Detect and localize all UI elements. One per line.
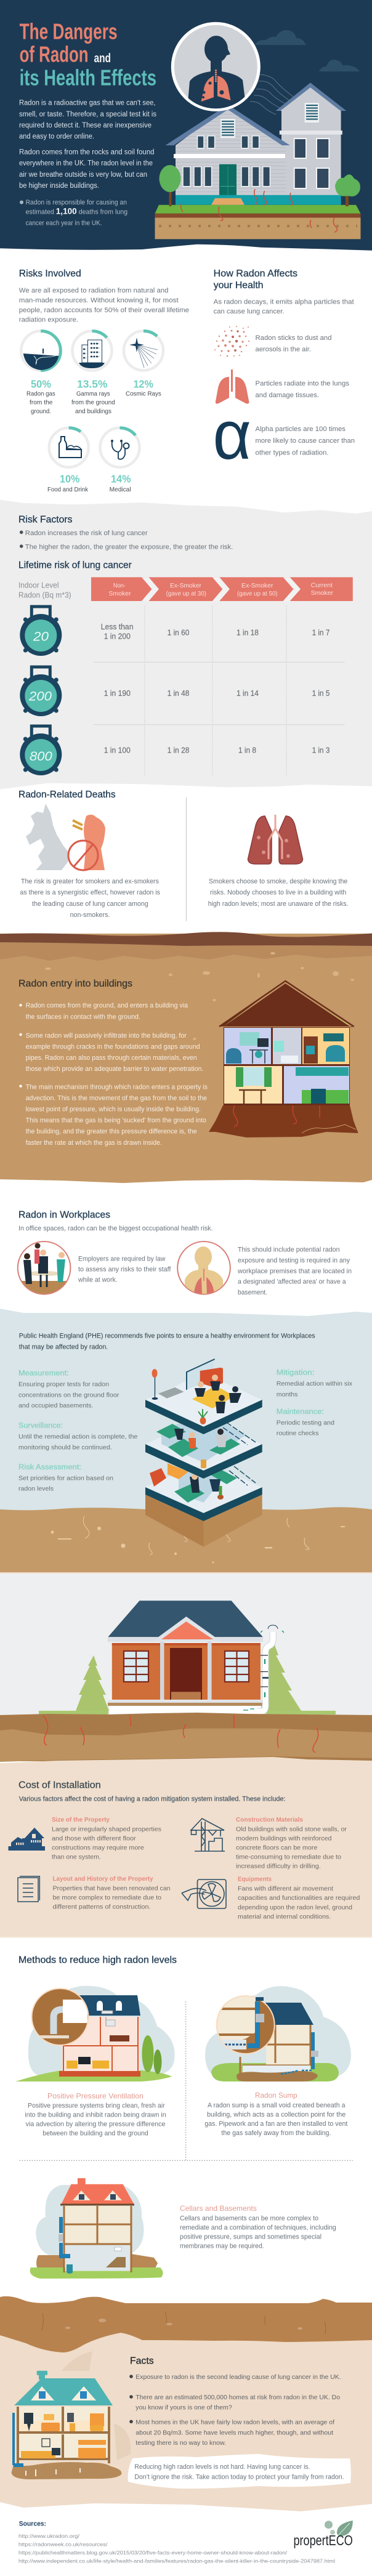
- table grid lines: [94, 605, 345, 776]
- bullet: advection: the building, and the greater this pressure difference is, the: [26, 1128, 197, 1136]
- illustration: facts house: [11, 2371, 121, 2479]
- fact bullets: There are an estimated 500,000 homes at risk from radon in the UK. Do: [135, 2394, 340, 2401]
- cost factor: size of property: and those with different floor: [52, 1835, 136, 1842]
- text: smokers choose: [208, 878, 349, 908]
- cost factor: equipments: Equipments: [238, 1876, 272, 1883]
- table row: 200: 1 in 48: [168, 689, 189, 698]
- text: potential radon exposure: [237, 1246, 352, 1296]
- text: alpha particles: Alpha particles are 100 times: [255, 426, 346, 433]
- intro text: Radon is a radioactive gas that we can't see,: [19, 100, 155, 107]
- stat: 50% radon gas: 50%: [31, 378, 51, 390]
- text: radon sump: Radon Sump: [255, 2091, 297, 2100]
- text: particles radiate: and damage tissues.: [255, 392, 319, 399]
- point: risk assessment: Set priorities for action based on: [18, 1474, 113, 1482]
- tower: [281, 110, 341, 196]
- fact bullets: testing there is no way to know.: [135, 2439, 226, 2447]
- cost factor: equipments: Fans with different air movement: [238, 1885, 333, 1892]
- dotted dividers: [20, 2001, 353, 2162]
- text: radon sticks: Radon sticks to dust and: [255, 334, 331, 342]
- text: particles radiate: Particles radiate into the lungs: [255, 380, 350, 387]
- callout: reducing high radon levels: Reducing high radon levels is not hard. Having lung cancer is.: [134, 2463, 310, 2471]
- stopwatch: 200: 200: [28, 690, 52, 704]
- text: employers: while at work.: [78, 1277, 118, 1284]
- stat: 10% food and drink: Food and Drink: [47, 486, 89, 493]
- stat: 14% medical: [100, 428, 139, 493]
- sources: http://www.ukradon.org/: [18, 2533, 80, 2539]
- stopwatch: 200: [20, 667, 62, 716]
- logo: propertECO: [293, 2521, 353, 2548]
- panel: risk factors background: [0, 500, 372, 789]
- heading: facts: Facts: [130, 2356, 154, 2366]
- text: positive pressure ventilation: Positive pressure systems bring clean, fresh air: [28, 2102, 165, 2110]
- callout: reducing high radon levels: [128, 2454, 351, 2489]
- text: synergistic effect: the leading cause of lung cancer among: [32, 900, 148, 908]
- risks text: man-made resources. Without knowing it, for most: [19, 297, 179, 304]
- cost factor: size of property: than one system.: [52, 1854, 101, 1861]
- panel: PHE background: [0, 1309, 372, 1510]
- text: synergistic effect: The risk is greater for smokers and ex-smokers: [21, 878, 159, 885]
- gable: [152, 1617, 222, 1642]
- stat: 12% cosmic rays: [124, 331, 163, 397]
- text: potential radon exposure: This should include potential radon: [238, 1246, 340, 1254]
- cost factor: construction materials: time-consuming to remediate due to: [236, 1854, 341, 1861]
- stat: 13.5% gamma rays: Gamma rays: [76, 390, 110, 397]
- fact bullets: Most homes in the UK have fairly low radon levels, with an average of: [135, 2419, 334, 2426]
- text: potential radon exposure: exposure and testing is required in any: [238, 1257, 350, 1264]
- stopwatch: 800: [20, 726, 62, 775]
- upper rooms: [224, 1027, 350, 1104]
- icon: alpha symbol: α: [213, 397, 251, 474]
- point: risk assessment: [18, 1464, 113, 1493]
- PHE intro text: Public Health England (PHE) recommends five points to ensure a healthy environment for Workplaces: [19, 1333, 315, 1340]
- title: and: [94, 52, 111, 65]
- cost factor: construction materials: concrete floors can be more: [236, 1844, 318, 1851]
- walls: [110, 1642, 262, 1700]
- title: its Health Effects: [20, 65, 156, 90]
- icon: house: [9, 1828, 45, 1851]
- chevron header: Current: [311, 581, 333, 589]
- text: positive pressure ventilation: between the building and the ground: [42, 2130, 148, 2138]
- text: positive pressure ventilation: [25, 2091, 166, 2138]
- stopwatch: 800: 800: [30, 749, 52, 764]
- chevron header: [91, 577, 353, 601]
- table row: 20: 1 in 7: [312, 629, 330, 637]
- heading: methods: Methods to reduce high radon levels: [18, 1955, 177, 1966]
- intro text: and easy to order online.: [19, 133, 94, 140]
- text: alpha particles: [255, 426, 355, 456]
- point: maintenance: Maintenance:: [277, 1408, 324, 1416]
- intro text: smell, or taste. Therefore, a special test kit is: [19, 111, 156, 118]
- text: synergistic effect: [20, 878, 160, 919]
- icon: crane: [191, 1819, 225, 1851]
- text: employers: [78, 1255, 171, 1284]
- heading: lifetime risk: Lifetime risk of lung cancer: [18, 560, 132, 571]
- point: mitigation: months: [277, 1391, 297, 1398]
- text: cellars and basements: Cellars and Basements: [180, 2204, 257, 2213]
- workplaces intro: In office spaces, radon can be the biggest occupational health risk.: [18, 1225, 213, 1232]
- text: cellars and basements: Cellars and basements can be more complex to: [180, 2215, 318, 2222]
- bullet: passive infiltration: those which provide an adequate barrier to water penetration.: [26, 1065, 203, 1073]
- table row: 200: 1 in 14: [237, 689, 259, 698]
- stat: 13.5% gamma rays: [71, 331, 115, 415]
- point: maintenance: routine checks: [277, 1430, 318, 1437]
- bullet: passive infiltration: [19, 1032, 204, 1073]
- cost factor: equipments: material and internal conditions.: [238, 1913, 331, 1920]
- cost factor: layout and history: be more complex to remediate due to: [53, 1894, 161, 1901]
- teal foundation: [176, 195, 341, 205]
- title: of Radon: [20, 42, 89, 67]
- stat: 14% medical: 14%: [111, 472, 131, 485]
- text: radon sump: building, which acts as a collection point for the: [207, 2111, 346, 2118]
- bullet: radon comes from ground: Radon comes from the ground, and enters a building via: [26, 1002, 188, 1009]
- soil under house: [209, 1105, 358, 1137]
- bullet: passive infiltration: example through cracks in the foundations and gaps around: [26, 1043, 200, 1051]
- circle: person with lungs: [172, 23, 259, 110]
- bullet: advection: faster the rate at which the gas is drawn inside.: [26, 1139, 162, 1147]
- cost factor: size of property: Large or irregularly shaped properties: [52, 1825, 161, 1833]
- text: radon sticks: aerosols in the air.: [255, 346, 311, 353]
- stopwatch: 20: 20: [33, 630, 49, 644]
- sources: https://publichealthmatters.blog.gov.uk/2015/03/20/five-facts-every-home-owner-should-know-about-radon/: [18, 2550, 288, 2556]
- stat: 13.5% gamma rays: and buildings: [75, 408, 111, 415]
- middle floor: [145, 1418, 262, 1471]
- hero bullet: 1,100 deaths: Radon is responsible for causing an: [26, 199, 127, 206]
- trees: [169, 188, 171, 206]
- heading: risks involved: Risks Involved: [19, 269, 81, 279]
- panel: radon entry background: [0, 932, 372, 1183]
- risks text: [19, 287, 189, 324]
- heading: risk factors: Risk Factors: [18, 514, 73, 525]
- table row: 20: 1 in 18: [237, 629, 259, 637]
- text: radon sump: A radon sump is a small void created beneath a: [208, 2102, 346, 2109]
- icon: damaged lungs: [248, 815, 303, 864]
- ground strip below PHE panel: [0, 1507, 372, 1573]
- cracks: [181, 189, 338, 232]
- chevron header: Ex-Smoker: [241, 582, 273, 589]
- stat: 14% medical: Medical: [110, 486, 131, 493]
- chevron header: Ex-Smoker: [170, 582, 201, 589]
- risks text: people, radon accounts for 50% of their overall lifetime: [19, 307, 189, 314]
- cutaway house illustration: [209, 980, 358, 1137]
- text: positive pressure ventilation: Positive Pressure Ventilation: [47, 2091, 144, 2100]
- divider: [185, 797, 187, 921]
- panel: house with radon pipe background: [0, 1573, 372, 1716]
- hero house illustration: [155, 83, 361, 239]
- stat: 12% cosmic rays: 12%: [133, 378, 153, 390]
- point: mitigation: Remedial action within six: [277, 1380, 353, 1387]
- illustration: positive pressure ventilation: [15, 1986, 175, 2081]
- table row: 20: 1 in 60: [168, 629, 189, 637]
- cost factor: size of property: constructions may require more: [52, 1844, 144, 1851]
- chevron header: (gave up at 50): [237, 590, 278, 597]
- stat: 50% radon gas: [21, 331, 60, 415]
- text: potential radon exposure: workplace premises that are located in: [237, 1267, 352, 1275]
- health intro text: [214, 298, 354, 315]
- text: cellars and basements: remediate and a combination of techniques, including: [180, 2224, 336, 2231]
- risk factor bullets: Radon increases the risk of lung cancer: [25, 530, 148, 537]
- intro text: air we breathe outside is very low, but can: [19, 171, 147, 179]
- ground under orange house: [0, 1713, 372, 1762]
- radon gas lines: [250, 75, 296, 115]
- intro text: be higher inside buildings.: [19, 182, 99, 190]
- text: cellars and basements: [180, 2204, 336, 2250]
- cost factor: construction materials: Construction Materials: [236, 1816, 303, 1823]
- point: surveillance: monitoring should be continued.: [18, 1443, 112, 1451]
- text: potential radon exposure: a designated 'affected area' or have a: [238, 1278, 346, 1286]
- point: measurement: Ensuring proper tests for radon: [18, 1381, 109, 1388]
- bullet: passive infiltration: pipes. Radon can also pass through certain materials, even: [26, 1054, 197, 1062]
- sources: Sources:: [19, 2520, 46, 2527]
- hero clouds: [255, 30, 360, 71]
- bullet: advection: advection. This is the movement of the gas from the soil to the: [26, 1094, 207, 1102]
- hero bullet: 1,100 deaths: [20, 199, 127, 227]
- fact bullets: Exposure to radon is the second leading cause of lung cancer in the UK.: [135, 2373, 341, 2381]
- text: radon sump: gas. Pipework and a fan are then installed to vent: [204, 2120, 347, 2128]
- roof: [108, 1601, 263, 1637]
- heading: how radon affects your health: your Health: [214, 280, 264, 291]
- icon: fan: [182, 1880, 226, 1908]
- sources: https://radonweek.co.uk/resources/: [18, 2541, 108, 2547]
- ground layers: [155, 205, 361, 214]
- heading: cost of installation: Cost of Installation: [18, 1780, 101, 1790]
- point: surveillance: Until the remedial action is complete, the: [18, 1433, 138, 1440]
- text: employers: Employers are required by law: [78, 1255, 166, 1262]
- table label: indoor radon level: Indoor Level: [18, 581, 59, 590]
- table row: 800: 1 in 28: [168, 746, 189, 755]
- point: mitigation: [277, 1370, 353, 1398]
- table row: 200: 1 in 190: [104, 689, 131, 698]
- intro text: required to detect it. These are inexpensive: [19, 122, 152, 129]
- PHE intro text: that may be affected by radon.: [19, 1344, 108, 1351]
- risk factor bullets: [20, 530, 233, 551]
- point: maintenance: Periodic testing and: [277, 1419, 334, 1426]
- top floor: [145, 1373, 262, 1427]
- bullet: advection: This means that the gas is being 'sucked' from the ground into: [26, 1117, 206, 1124]
- chevron header: Smoker: [108, 590, 131, 597]
- stat: 13.5% gamma rays: from the ground: [71, 398, 115, 406]
- text: smokers choose: high radon levels; most are unaware of the risks.: [208, 900, 349, 908]
- text: radon sump: the gas safely away from the building.: [221, 2130, 331, 2137]
- cost factor: construction materials: [236, 1816, 347, 1870]
- cost factor: layout and history: [53, 1875, 171, 1910]
- chevron header: Smoker: [311, 589, 333, 597]
- cost factor: size of property: Size of the Property: [52, 1816, 110, 1823]
- cost factor: layout and history: Layout and History of the Property: [53, 1875, 153, 1883]
- bullet: passive infiltration: Some radon will passively infiltrate into the building, for: [26, 1032, 187, 1040]
- table label: indoor radon level: Radon (Bq m*3): [18, 591, 71, 599]
- PHE intro text: [19, 1333, 315, 1351]
- stat: 12% cosmic rays: Cosmic Rays: [126, 390, 161, 397]
- table row: 20: [101, 623, 330, 641]
- stat: 50% radon gas: from the: [30, 398, 53, 406]
- hero background: [0, 0, 372, 251]
- text: radon sticks: [255, 334, 331, 353]
- text: positive pressure ventilation: into the building and inhibit radon being drawn in: [25, 2112, 166, 2119]
- point: surveillance: [18, 1423, 138, 1451]
- intro text: [19, 100, 156, 190]
- circle: office meeting: [17, 1242, 71, 1296]
- table row: 200: [104, 689, 330, 698]
- cost factor: construction materials: Old buildings with solid stone walls, or: [236, 1825, 347, 1833]
- text: cellars and basements: membranes may be required.: [180, 2242, 264, 2250]
- hero bullet: 1,100 deaths: estimated 1,100 deaths from lung: [26, 206, 127, 216]
- table row: 20: 1 in 200: [104, 632, 131, 641]
- health intro text: can cause lung cancer.: [214, 308, 285, 315]
- chevron header: Non-: [113, 582, 126, 589]
- pine trees: [76, 1640, 301, 1711]
- table label: indoor radon level: [18, 581, 71, 599]
- text: particles radiate: [255, 380, 350, 399]
- point: risk assessment: radon levels: [18, 1485, 54, 1493]
- risk factor bullets: The higher the radon, the greater the exposure, the greater the risk.: [25, 544, 233, 551]
- bullet: radon comes from ground: [19, 1002, 188, 1020]
- door: [219, 164, 237, 198]
- hero bullet: 1,100 deaths: cancer each year in the UK.: [26, 220, 102, 227]
- text: radon sump: [204, 2091, 347, 2137]
- intro text: everywhere in the UK. The radon level in the: [19, 160, 153, 168]
- soil block: [145, 1495, 203, 1547]
- main house body: [176, 106, 286, 195]
- heading: how radon affects your health: [214, 269, 297, 291]
- sources: http://www.independent.co.uk/life-style/health-and-families/features/radon-gas-the-silent-killer-in-the-countryside-2047987.html: [18, 2558, 335, 2564]
- heading: how radon affects your health: How Radon Affects: [214, 269, 297, 279]
- panel: cost of installation background: [0, 1757, 372, 1938]
- stat: 10% food and drink: 10%: [60, 472, 80, 485]
- panel: facts background: [0, 2296, 372, 2511]
- door: [170, 1648, 202, 1700]
- cost factor: size of property: [52, 1816, 161, 1861]
- attic: [225, 984, 349, 1025]
- icon: lungs: [216, 369, 249, 404]
- fact bullets: you know if yours is one of them?: [135, 2404, 232, 2411]
- title: The Dangers: [20, 18, 118, 44]
- sources: [18, 2520, 335, 2564]
- text: alpha particles: more likely to cause cancer than: [255, 437, 355, 445]
- text: potential radon exposure: basement.: [238, 1289, 267, 1296]
- text: smokers choose: risks. Nobody chooses to live in a building with: [210, 889, 346, 897]
- text: synergistic effect: non-smokers.: [70, 911, 110, 919]
- bullet: advection: lowest point of pressure, which is usually inside the building.: [26, 1106, 201, 1113]
- table row: 800: [104, 746, 330, 755]
- bullet: advection: The main mechanism through which radon enters a property is: [26, 1083, 208, 1091]
- icon: UK map with no-smoking hand: [26, 804, 105, 870]
- point: maintenance: [277, 1408, 334, 1437]
- cost factor: equipments: depending upon the radon level, ground: [238, 1904, 352, 1911]
- fact bullets: about 20 Bq/m3. Some have levels much higher, though, and without: [135, 2429, 333, 2436]
- text: employers: to assess any risks to their staff: [78, 1266, 171, 1273]
- intro text: Radon comes from the rocks and soil found: [19, 149, 154, 156]
- callout: reducing high radon levels: Don't ignore the risk. Take action today to protect your family from radon.: [134, 2474, 344, 2481]
- text: alpha particles: other types of radiation.: [255, 449, 329, 456]
- point: risk assessment: Risk Assessment:: [18, 1464, 81, 1471]
- chevron header: (gave up at 30): [166, 590, 206, 597]
- illustration: radon sump: [205, 1986, 351, 2081]
- table row: 200: 1 in 5: [312, 689, 330, 698]
- point: measurement: concentrations on the ground floor: [18, 1391, 119, 1399]
- orange house with radon pipe: [39, 1601, 336, 1714]
- heading: radon entry into buildings: Radon entry into buildings: [18, 979, 132, 989]
- health intro text: As radon decays, it emits alpha particles that: [214, 298, 354, 305]
- base: [108, 1700, 262, 1703]
- cost factor: construction materials: modern buildings with reinforced: [236, 1835, 332, 1842]
- text: smokers choose: Smokers choose to smoke, despite knowing the: [209, 878, 347, 885]
- fact bullets: [129, 2373, 341, 2447]
- table row: 800: 1 in 8: [238, 746, 256, 755]
- stat: 13.5% gamma rays: 13.5%: [77, 378, 108, 390]
- illustration: cellars and basements: [30, 2178, 163, 2279]
- point: mitigation: Mitigation:: [277, 1370, 314, 1377]
- bottom floor: [145, 1461, 262, 1513]
- stat: 50% radon gas: Radon gas: [26, 390, 55, 397]
- text: synergistic effect: as there is a synergistic effect, however radon is: [20, 889, 160, 897]
- stat: 50% radon gas: ground.: [31, 408, 51, 415]
- point: measurement: and occupied basements.: [18, 1402, 93, 1410]
- cost factor: construction materials: increased difficulty in drilling.: [236, 1863, 321, 1870]
- cost factor: layout and history: Properties that have been renovated can: [53, 1884, 171, 1892]
- risks text: We are all exposed to radiation from natural and: [19, 287, 168, 294]
- point: measurement: Measurement:: [18, 1370, 69, 1377]
- logo: propertECO: propertECO: [293, 2532, 353, 2548]
- text: cellars and basements: positive pressure, sumps and sometimes special: [180, 2233, 321, 2240]
- cost intro: Various factors affect the cost of having a radon mitigation system installed. These include:: [19, 1795, 285, 1803]
- text: positive pressure ventilation: via advection by altering the pressure difference: [26, 2121, 165, 2128]
- cost factor: equipments: capacities and functionalities are required: [238, 1894, 360, 1902]
- stat: 10% food and drink: [47, 428, 89, 493]
- circle: person lungs: [177, 1242, 230, 1296]
- bullet: radon comes from ground: the surfaces in contact with the ground.: [26, 1013, 140, 1020]
- point: measurement: [18, 1370, 119, 1410]
- windows: [124, 1651, 249, 1682]
- isometric office building: [145, 1359, 262, 1547]
- title: [20, 18, 156, 90]
- risks text: radiation exposure.: [19, 317, 78, 324]
- cost factor: equipments: [238, 1876, 360, 1920]
- pipe: [257, 1632, 273, 1711]
- table row: 800: 1 in 3: [312, 746, 330, 755]
- table row: 20: Less than: [101, 623, 134, 631]
- icon: document: [18, 1876, 39, 1902]
- point: surveillance: Surveillance:: [18, 1423, 63, 1430]
- icon: dust particles: [214, 326, 249, 357]
- cost factor: layout and history: different patterns of construction.: [53, 1903, 151, 1910]
- stopwatch: 20: [20, 607, 62, 656]
- heading: radon-related deaths: Radon-Related Deaths: [18, 789, 116, 800]
- table row: 800: 1 in 100: [104, 746, 131, 755]
- heading: radon in workplaces: Radon in Workplaces: [18, 1209, 110, 1220]
- lower rooms: [224, 1066, 282, 1104]
- bullet: advection: [19, 1083, 208, 1147]
